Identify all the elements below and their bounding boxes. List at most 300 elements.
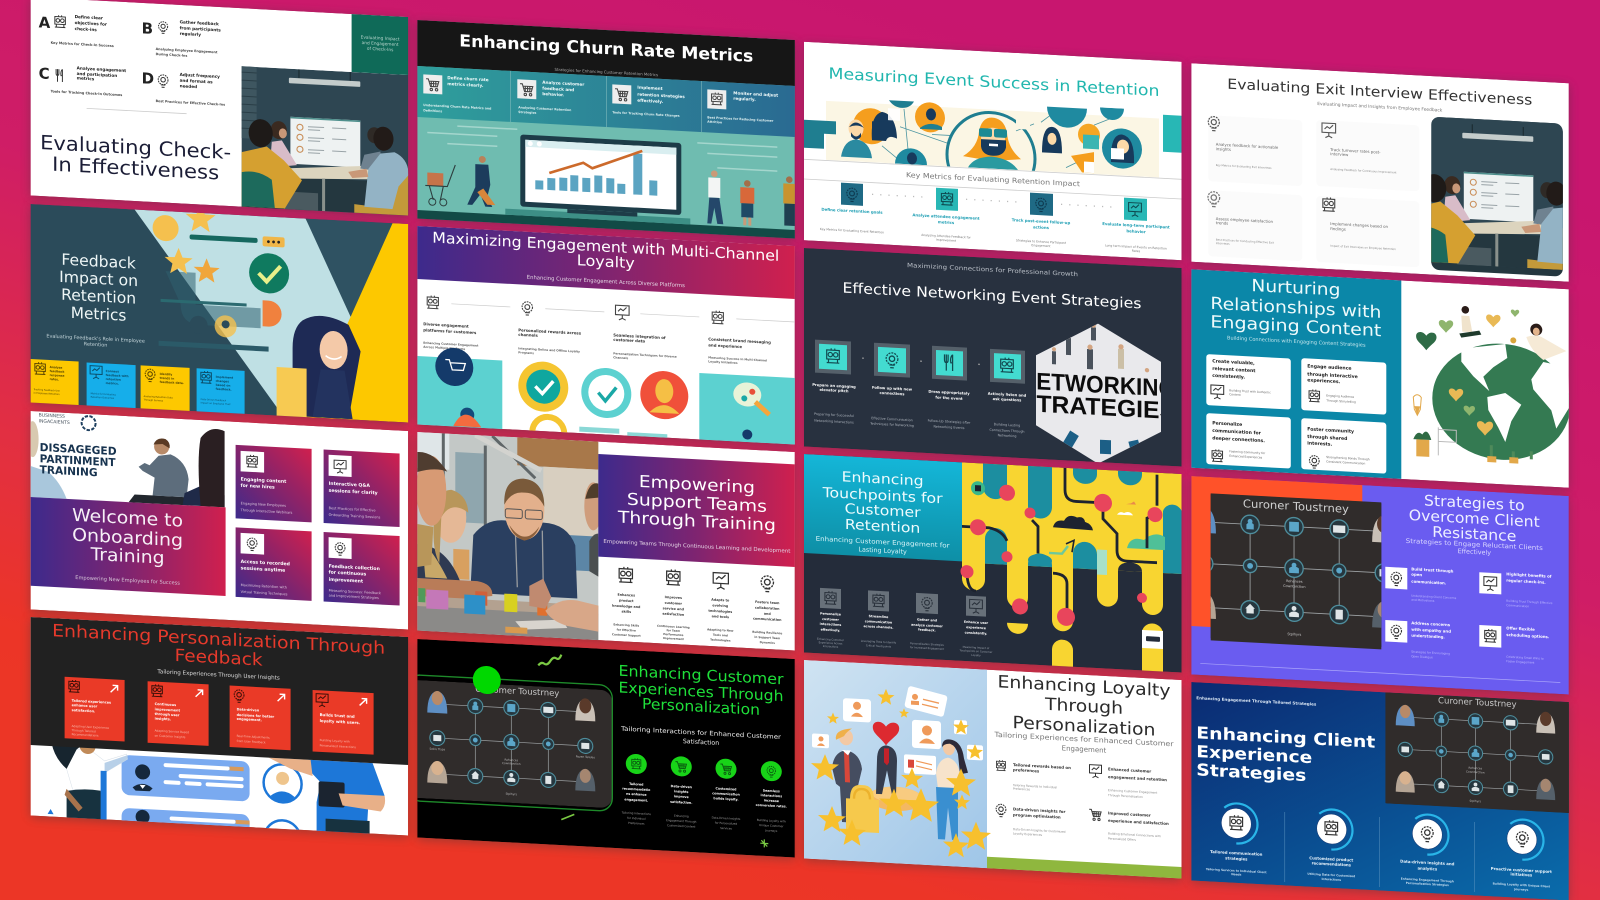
- card grid: Implement changes based on: [1330, 221, 1388, 229]
- touchpoint labels: experience: [966, 625, 986, 630]
- title: Evaluating Check-: [40, 131, 231, 164]
- item grid: A B C D: check-ins: [75, 26, 97, 32]
- item grid: A B C D: D: [142, 69, 154, 88]
- red cards: Data-driven: [237, 707, 260, 713]
- red cards: Through Tailored: [71, 728, 96, 733]
- touchpoint labels: across channels.: [864, 624, 893, 630]
- content cards: Engage audience: [1307, 363, 1352, 372]
- feedback cards: rates.: [50, 377, 59, 382]
- labels: builds loyalty.: [713, 796, 739, 802]
- decorative green shapes: [473, 650, 768, 848]
- red cards: insights.: [155, 717, 171, 721]
- touchpoint descriptions: Touchpoints on Customer: [960, 648, 993, 654]
- content cards: Fostering Community for: [1229, 449, 1266, 455]
- title block: Lasting Loyalty: [858, 545, 907, 556]
- card grid: findings: [1330, 226, 1346, 232]
- content cards: through shared: [1307, 434, 1347, 442]
- strategy descriptions: Networking Interactions: [814, 419, 854, 425]
- photo: journey diagram with green border: Rozen Tereles: [576, 754, 595, 759]
- title: Experiences Through: [618, 679, 784, 705]
- panel: Enhancing Customer Experiences Through Personalization: [407, 638, 795, 860]
- feedback cards: trends in: [160, 376, 174, 381]
- title: [42, 134, 230, 180]
- sidebar label: and Engagement: [362, 40, 399, 48]
- metric columns: Attrition: [707, 120, 722, 124]
- photo: meeting room: [1431, 117, 1563, 276]
- title panel: Support Teams: [627, 490, 767, 516]
- content cards: Engaging Audience: [1326, 393, 1354, 399]
- strategy items: understanding.: [1411, 633, 1445, 639]
- feature cards: Maximizing Retention with: [241, 583, 287, 590]
- photo: trainer talking: [27, 419, 225, 507]
- benefit labels: knowledge and: [612, 604, 641, 609]
- touchpoint icons: [820, 588, 986, 617]
- panel: Enhancing Churn Rate Metrics: [417, 20, 795, 241]
- labels: improve: [674, 794, 689, 799]
- title: Measuring Event Success in Retention: [829, 65, 1160, 100]
- step labels: [822, 208, 1170, 234]
- item grid: A B C D: B: [142, 19, 153, 38]
- strategy descriptions: Preparing for Successful: [814, 412, 854, 418]
- labels: Tailored: [629, 782, 644, 787]
- strategy items: scheduling options.: [1506, 632, 1550, 639]
- strategy descriptions: Networking Events: [933, 424, 965, 430]
- title: [618, 663, 784, 720]
- photo: journey diagram with green border: Rohances: [505, 758, 519, 762]
- illustration: woman with document: [277, 313, 361, 420]
- title: Metrics: [71, 304, 126, 325]
- title: Feedback: [175, 646, 263, 671]
- descriptions: Data-Driven Insights: [712, 816, 741, 821]
- title: Feedback: [61, 251, 136, 273]
- channel text: platforms for customers: [423, 327, 477, 335]
- content cards: relevant content: [1212, 366, 1256, 374]
- title: [1196, 723, 1375, 789]
- subtitle: Engagement: [1062, 744, 1107, 755]
- heading block: TRAINING: [40, 463, 98, 479]
- content cards: Personalize: [1212, 420, 1242, 428]
- strategy items: Foster Engagement: [1506, 659, 1535, 665]
- channel text: channels: [518, 332, 538, 338]
- benefit items: Enhancing Customer Engagement: [1108, 788, 1158, 795]
- metric columns: metrics clearly.: [447, 81, 484, 88]
- strategy descriptions: [814, 412, 1025, 439]
- touchpoint descriptions: [817, 636, 993, 658]
- channel text: Seamless integration of: [613, 332, 666, 340]
- benefit labels: product: [619, 598, 634, 603]
- photo: journey diagram: Rohances: [1286, 579, 1303, 584]
- ring labels: Proactive customer support: [1491, 866, 1552, 874]
- card grid: Assess employee satisfaction: [1216, 216, 1274, 224]
- touchpoint descriptions: Personalization Strategies: [910, 641, 944, 647]
- metric columns: Tools for Tracking Churn Rate Changes: [612, 110, 680, 118]
- benefit descriptions: Dynamics: [760, 640, 775, 645]
- illustration: feedback rating screen: •••: [266, 237, 281, 247]
- panel: Enhancing Loyalty Through Personalization: [804, 660, 1182, 881]
- feedback cards: Through Surveys: [144, 398, 164, 403]
- channel text: Loyalty Initiatives: [708, 359, 738, 365]
- red cards: Continuous: [155, 702, 176, 707]
- title: Enhancing Loyalty: [998, 672, 1171, 701]
- step labels: actions: [1033, 224, 1050, 230]
- metric columns: Define churn rate: [447, 75, 489, 82]
- header band: [417, 226, 795, 299]
- card grid: [1207, 116, 1396, 250]
- touchpoint labels: feedback.: [918, 628, 936, 632]
- ring descriptions: Interactions: [1321, 877, 1341, 882]
- labels: satisfaction.: [670, 800, 692, 805]
- benefit labels: Adapts to: [711, 598, 730, 603]
- sidebar label: Evaluating Impact: [361, 34, 400, 43]
- photo: journey diagram: Cowntarction: [1466, 770, 1485, 775]
- feedback cards: Analyze: [50, 365, 62, 370]
- title: Nurturing: [1251, 275, 1340, 300]
- feedback cards: Implement: [216, 375, 234, 380]
- subtitle: Effectively: [1458, 547, 1491, 557]
- benefit labels: satisfaction: [662, 612, 685, 617]
- benefit items: Tailored rewards based on: [1013, 762, 1071, 770]
- title panel: Empowering New Employees for Success: [75, 575, 180, 587]
- panel: Feedback Impact on Retention Metrics: [31, 195, 409, 425]
- strategy labels: connections: [879, 391, 905, 396]
- photo: journey diagram: Cowntarction: [1283, 584, 1306, 589]
- benefit items: Building Emotional Connections with: [1108, 831, 1161, 838]
- channel text: Measuring Success in Multi-Channel: [708, 355, 767, 363]
- step labels: Define clear retention goals: [821, 207, 883, 215]
- descriptions: Services: [720, 826, 732, 831]
- illustration: people and cart: [425, 153, 795, 228]
- feedback cards: Analyzing Retention Data: [144, 395, 173, 400]
- feedback cards: feedback with: [106, 373, 129, 378]
- benefit descriptions: Customer Support: [612, 632, 641, 638]
- title: Overcome Client: [1409, 507, 1540, 531]
- ring labels: analytics: [1417, 865, 1438, 872]
- diagram title: Curoner Toustrney: [1438, 696, 1517, 710]
- panel: Enhancing Touchpoints for Customer Retention: [804, 454, 1182, 675]
- feedback cards: changes: [216, 379, 229, 384]
- channel text: [423, 321, 771, 368]
- step descriptions: Key Metrics for Evaluating Event Retention: [820, 227, 884, 234]
- item grid: A B C D: A: [39, 13, 51, 32]
- strategy labels: for the event: [935, 396, 963, 401]
- title panel: [31, 497, 226, 596]
- sidebar label: of Check-Ins: [367, 46, 394, 53]
- content cards: Through Storytelling: [1325, 398, 1356, 404]
- feedback cards: Metrics for Evaluating: [91, 392, 116, 397]
- feedback cards: response: [50, 373, 65, 378]
- content cards: Consistent Communication: [1326, 459, 1365, 466]
- benefit descriptions: Adapting to New: [707, 627, 734, 633]
- ring descriptions: Enhancing Engagement Through: [1401, 877, 1454, 883]
- benefit items: Tailoring Rewards to Individual: [1012, 783, 1057, 789]
- descriptions: Unique Customer: [759, 823, 784, 828]
- metric columns: Analyzing Customer Retention: [518, 105, 571, 112]
- labels: engagement.: [624, 797, 648, 803]
- feature cards: Best Practices for Effective: [329, 506, 376, 513]
- title panel: Empowering Teams Through Continuous Learning and Development: [603, 539, 790, 555]
- title panel: Onboarding: [72, 526, 183, 551]
- strategy labels: Prepare an engaging: [812, 383, 856, 389]
- touchpoint descriptions: for Increased Engagement: [910, 645, 944, 651]
- card grid: interview: [1330, 151, 1349, 157]
- title panel: Empowering: [639, 472, 755, 497]
- metric columns: Definitions: [423, 108, 442, 113]
- descriptions: Enhancing: [674, 814, 689, 818]
- benefit descriptions: Improvement: [663, 636, 685, 641]
- step descriptions: Analyzing Attendee Feedback for: [921, 233, 972, 240]
- feedback cards: Connect: [106, 369, 119, 374]
- item grid: A B C D: Gather feedback: [180, 19, 219, 26]
- panel: Enhancing Client Experience Strategies: [1191, 682, 1571, 900]
- strategy icons: [815, 340, 1025, 384]
- descriptions: Preferences: [628, 821, 645, 826]
- strategy items: Offer flexible: [1506, 625, 1535, 632]
- red cards: on Customer Insights: [155, 734, 186, 739]
- feedback cards: retention: [106, 377, 121, 382]
- red cards: Tailored experiences: [72, 699, 111, 705]
- feedback cards: Tracking Feedback Use: [34, 388, 60, 393]
- benefit descriptions: Performance: [663, 632, 683, 637]
- benefit descriptions: for Team: [666, 628, 680, 633]
- title panel: Training: [90, 545, 165, 569]
- subtitle: Evaluating Feedback's Role in Employee: [46, 333, 145, 345]
- strategy items: Address concerns: [1411, 620, 1451, 627]
- title panel: Through Training: [617, 507, 776, 535]
- feature cards: Engaging New Employees: [241, 501, 286, 508]
- panel: Enhancing Personalization Through Feedback: [31, 617, 409, 863]
- metric columns: Best Practices for Reducing Customer: [707, 115, 774, 123]
- title: In Effectiveness: [52, 153, 219, 184]
- labels: communication: [712, 791, 740, 797]
- feature cards: for new hires: [241, 483, 275, 491]
- content cards: experiences.: [1307, 377, 1341, 385]
- descriptions: for Individual: [627, 816, 646, 821]
- card grid: Impact of Exit Interviews on Employee Retention: [1330, 244, 1396, 251]
- feature cards: for continuous: [329, 569, 366, 578]
- content cards: communication for: [1212, 428, 1262, 437]
- touchpoint descriptions: Measuring Impact of: [963, 645, 989, 650]
- title panel: [598, 454, 795, 567]
- labels: ns enhance: [626, 792, 647, 797]
- benefit items: Through Personalization: [1107, 793, 1143, 799]
- touchpoint descriptions: Loyalty: [971, 653, 981, 657]
- illustration: monitor with bar chart: [417, 124, 795, 239]
- strategy labels: Follow up with new: [872, 386, 913, 392]
- photo: journey diagram: [1179, 491, 1417, 652]
- panel: Maximizing Engagement with Multi-Channel Loyalty: [417, 226, 795, 462]
- feedback cards: feedback data.: [160, 380, 184, 385]
- title: Personalization: [642, 696, 760, 719]
- step labels: Track post-event follow-up: [1012, 217, 1070, 225]
- content cards: Building Trust with Authentic: [1229, 388, 1271, 395]
- photo: journey diagram with green border: Cowntarction: [502, 761, 521, 766]
- step descriptions: Rates: [1132, 249, 1141, 253]
- benefit labels: customer: [665, 601, 682, 606]
- descriptions: Journeys: [764, 828, 778, 833]
- red cards: through user: [155, 712, 180, 717]
- content cards: Create valuable,: [1212, 358, 1255, 367]
- touchpoint descriptions: Leveraging Data to Identify: [861, 639, 897, 645]
- item grid: A B C D: [39, 12, 225, 107]
- eyebrow: Enhancing Engagement Through Tailored Strategies: [1196, 695, 1317, 707]
- strategy items: Communication: [1506, 603, 1529, 608]
- subtitle: Tailoring Experiences Through User Insights: [156, 669, 280, 682]
- feedback cards: Identify: [160, 372, 172, 377]
- channel text: Diverse engagement: [423, 321, 469, 329]
- title: Strategies: [1196, 760, 1306, 785]
- touchpoint labels: Gather and: [917, 617, 938, 623]
- red cards: Personalized Interactions: [320, 743, 356, 749]
- subtitle: Retention: [84, 341, 107, 349]
- benefit labels: and tools: [712, 614, 729, 619]
- item grid: A B C D: Analyze engagement: [77, 65, 126, 73]
- feedback cards: feedback.: [216, 387, 232, 392]
- content cards: Foster community: [1307, 426, 1354, 435]
- red cards: engagement.: [237, 717, 262, 722]
- item grid: A B C D: Adjust frequency: [180, 72, 220, 79]
- red cards: Recommendations: [72, 732, 99, 738]
- title: Retention: [61, 286, 136, 308]
- title: Experience: [1196, 742, 1312, 767]
- red cards: satisfaction.: [72, 708, 95, 713]
- strategy descriptions: Follow-Up Strategies after: [928, 419, 971, 425]
- touchpoint descriptions: Interactions: [823, 644, 839, 649]
- title: Resistance: [1432, 524, 1516, 545]
- descriptions: Customized Content: [667, 823, 696, 829]
- channel icons: [426, 296, 795, 324]
- title: [998, 672, 1170, 741]
- strategy items: regular check-ins.: [1506, 578, 1546, 585]
- channel text: Personalized rewards across: [518, 327, 582, 336]
- step labels: Analyze attendee engagement: [912, 212, 980, 221]
- channel text: Personalization Techniques for Diverse: [613, 351, 677, 359]
- benefit labels: [612, 592, 782, 622]
- feature cards: Through Interactive Webinars: [240, 508, 293, 515]
- descriptions: Engagement Through: [666, 818, 697, 824]
- item grid: A B C D: needed: [180, 83, 197, 89]
- benefit labels: Fosters team: [755, 600, 780, 605]
- card grid: insights: [1216, 146, 1231, 152]
- title: Effective Networking Event Strategies: [843, 281, 1142, 312]
- benefit labels: Enhances: [617, 593, 635, 598]
- ring descriptions: [1206, 866, 1551, 893]
- strategy items: Build trust through: [1411, 566, 1454, 574]
- feature cards: Feedback collection: [329, 563, 380, 572]
- title panel: Welcome to: [72, 506, 183, 532]
- benefit labels: and: [764, 612, 771, 616]
- title block: Touchpoints for: [821, 485, 943, 507]
- metric columns: regularly.: [733, 96, 756, 102]
- title block: Customer: [845, 501, 921, 521]
- content cards: [1206, 353, 1386, 474]
- benefit items: experience and satisfaction: [1108, 818, 1169, 826]
- red cards: from User Feedback: [237, 739, 266, 744]
- illustration: people network band: [804, 100, 1182, 178]
- title: Relationships with: [1210, 293, 1381, 322]
- benefit items: Data-driven insights for: [1013, 806, 1065, 814]
- metric columns: [417, 66, 795, 137]
- panel: Evaluating Exit Interview Effectiveness: [1191, 63, 1581, 284]
- panel: Empowering Support Teams Through Training: [416, 432, 795, 653]
- red cards: Adapting Service Based: [155, 729, 189, 734]
- header band: Loyalty: [577, 252, 635, 272]
- metric columns: effectively.: [637, 98, 664, 104]
- photo: journey diagram with green border: Stplhyrs: [506, 792, 518, 796]
- item grid: A B C D: Key Metrics for Check-In Success: [51, 41, 114, 48]
- touchpoint descriptions: Experience Across: [819, 640, 843, 646]
- title block: Retention: [845, 517, 920, 537]
- content cards: consistently.: [1212, 373, 1245, 381]
- touchpoint labels: consistently.: [965, 631, 987, 636]
- red cards: Builds trust and: [320, 712, 355, 719]
- header band: Enhancing Customer Engagement Across Diverse Platforms: [527, 275, 685, 289]
- red cards: Building Loyalty with: [320, 738, 350, 744]
- ring labels: Tailored communication: [1210, 849, 1263, 857]
- step descriptions: Strategies to Enhance Participant: [1016, 238, 1067, 245]
- item grid: A B C D: from participants: [180, 25, 221, 33]
- item grid: A B C D: Tools for Tracking Check-In Outcomes: [51, 89, 122, 97]
- step labels: metrics: [938, 219, 955, 225]
- channel text: Programs: [518, 350, 534, 355]
- subtitle: Strategies for Enhancing Customer Retention Metrics: [555, 67, 658, 77]
- red cards: improvement: [155, 707, 180, 713]
- benefit labels: evolving: [712, 603, 729, 608]
- feedback cards: based on: [216, 383, 230, 388]
- benefit items: Personalized Offers: [1108, 836, 1136, 842]
- labels: conversion rates.: [756, 803, 787, 809]
- channel text: Consistent brand messaging: [708, 336, 771, 345]
- title: Impact on: [59, 268, 138, 290]
- channel text: and experience: [708, 342, 742, 349]
- hexagon image: networking strategies: NETWORKING: [1020, 367, 1176, 403]
- photo: journey diagram: [1385, 692, 1571, 816]
- strategy items: Highlight benefits of: [1506, 571, 1552, 579]
- ring labels: Data-driven insights and: [1400, 859, 1455, 866]
- red cards: decisions for better: [237, 713, 275, 719]
- benefit descriptions: Continuous Learning: [657, 624, 690, 629]
- feature cards: sessions anytime: [241, 565, 285, 574]
- metric columns: Strategies: [518, 110, 537, 115]
- feature cards: Virtual Training Techniques: [241, 590, 288, 596]
- subtitle: [1406, 537, 1544, 560]
- item grid: A B C D: objectives for: [75, 20, 108, 27]
- feature cards: sessions for clarity: [329, 488, 378, 496]
- title: Strategies to: [1424, 492, 1525, 515]
- benefit descriptions: Enhancing Skills: [613, 622, 640, 628]
- item grid: A B C D: C: [39, 64, 50, 83]
- touchpoint labels: customer: [822, 617, 839, 622]
- strategy items: [1385, 565, 1553, 666]
- ring descriptions: Journeys: [1513, 887, 1529, 892]
- title: Through: [1044, 695, 1123, 719]
- benefit descriptions: in Support Team: [754, 635, 780, 640]
- heading block: PARTINMENT: [40, 452, 116, 469]
- title: Engaging Content: [1210, 311, 1382, 340]
- benefit items: engagement and retention: [1108, 774, 1167, 782]
- metric columns: Analyze customer: [542, 80, 585, 87]
- step labels: behavior: [1126, 228, 1146, 234]
- heading block: [40, 441, 117, 480]
- subtitle: [620, 726, 782, 750]
- title: Enhancing Personalization Through: [52, 621, 385, 659]
- content cards: through interactive: [1307, 371, 1358, 380]
- feedback cards: Retention Outcomes: [91, 396, 115, 400]
- metric columns: Understanding Churn Rate Metrics and: [423, 103, 491, 111]
- feedback cards: Impact on Employee Trust: [201, 402, 231, 406]
- item grid: A B C D: During Check-Ins: [156, 52, 187, 58]
- content cards: interests.: [1307, 440, 1332, 448]
- title: [1409, 492, 1540, 546]
